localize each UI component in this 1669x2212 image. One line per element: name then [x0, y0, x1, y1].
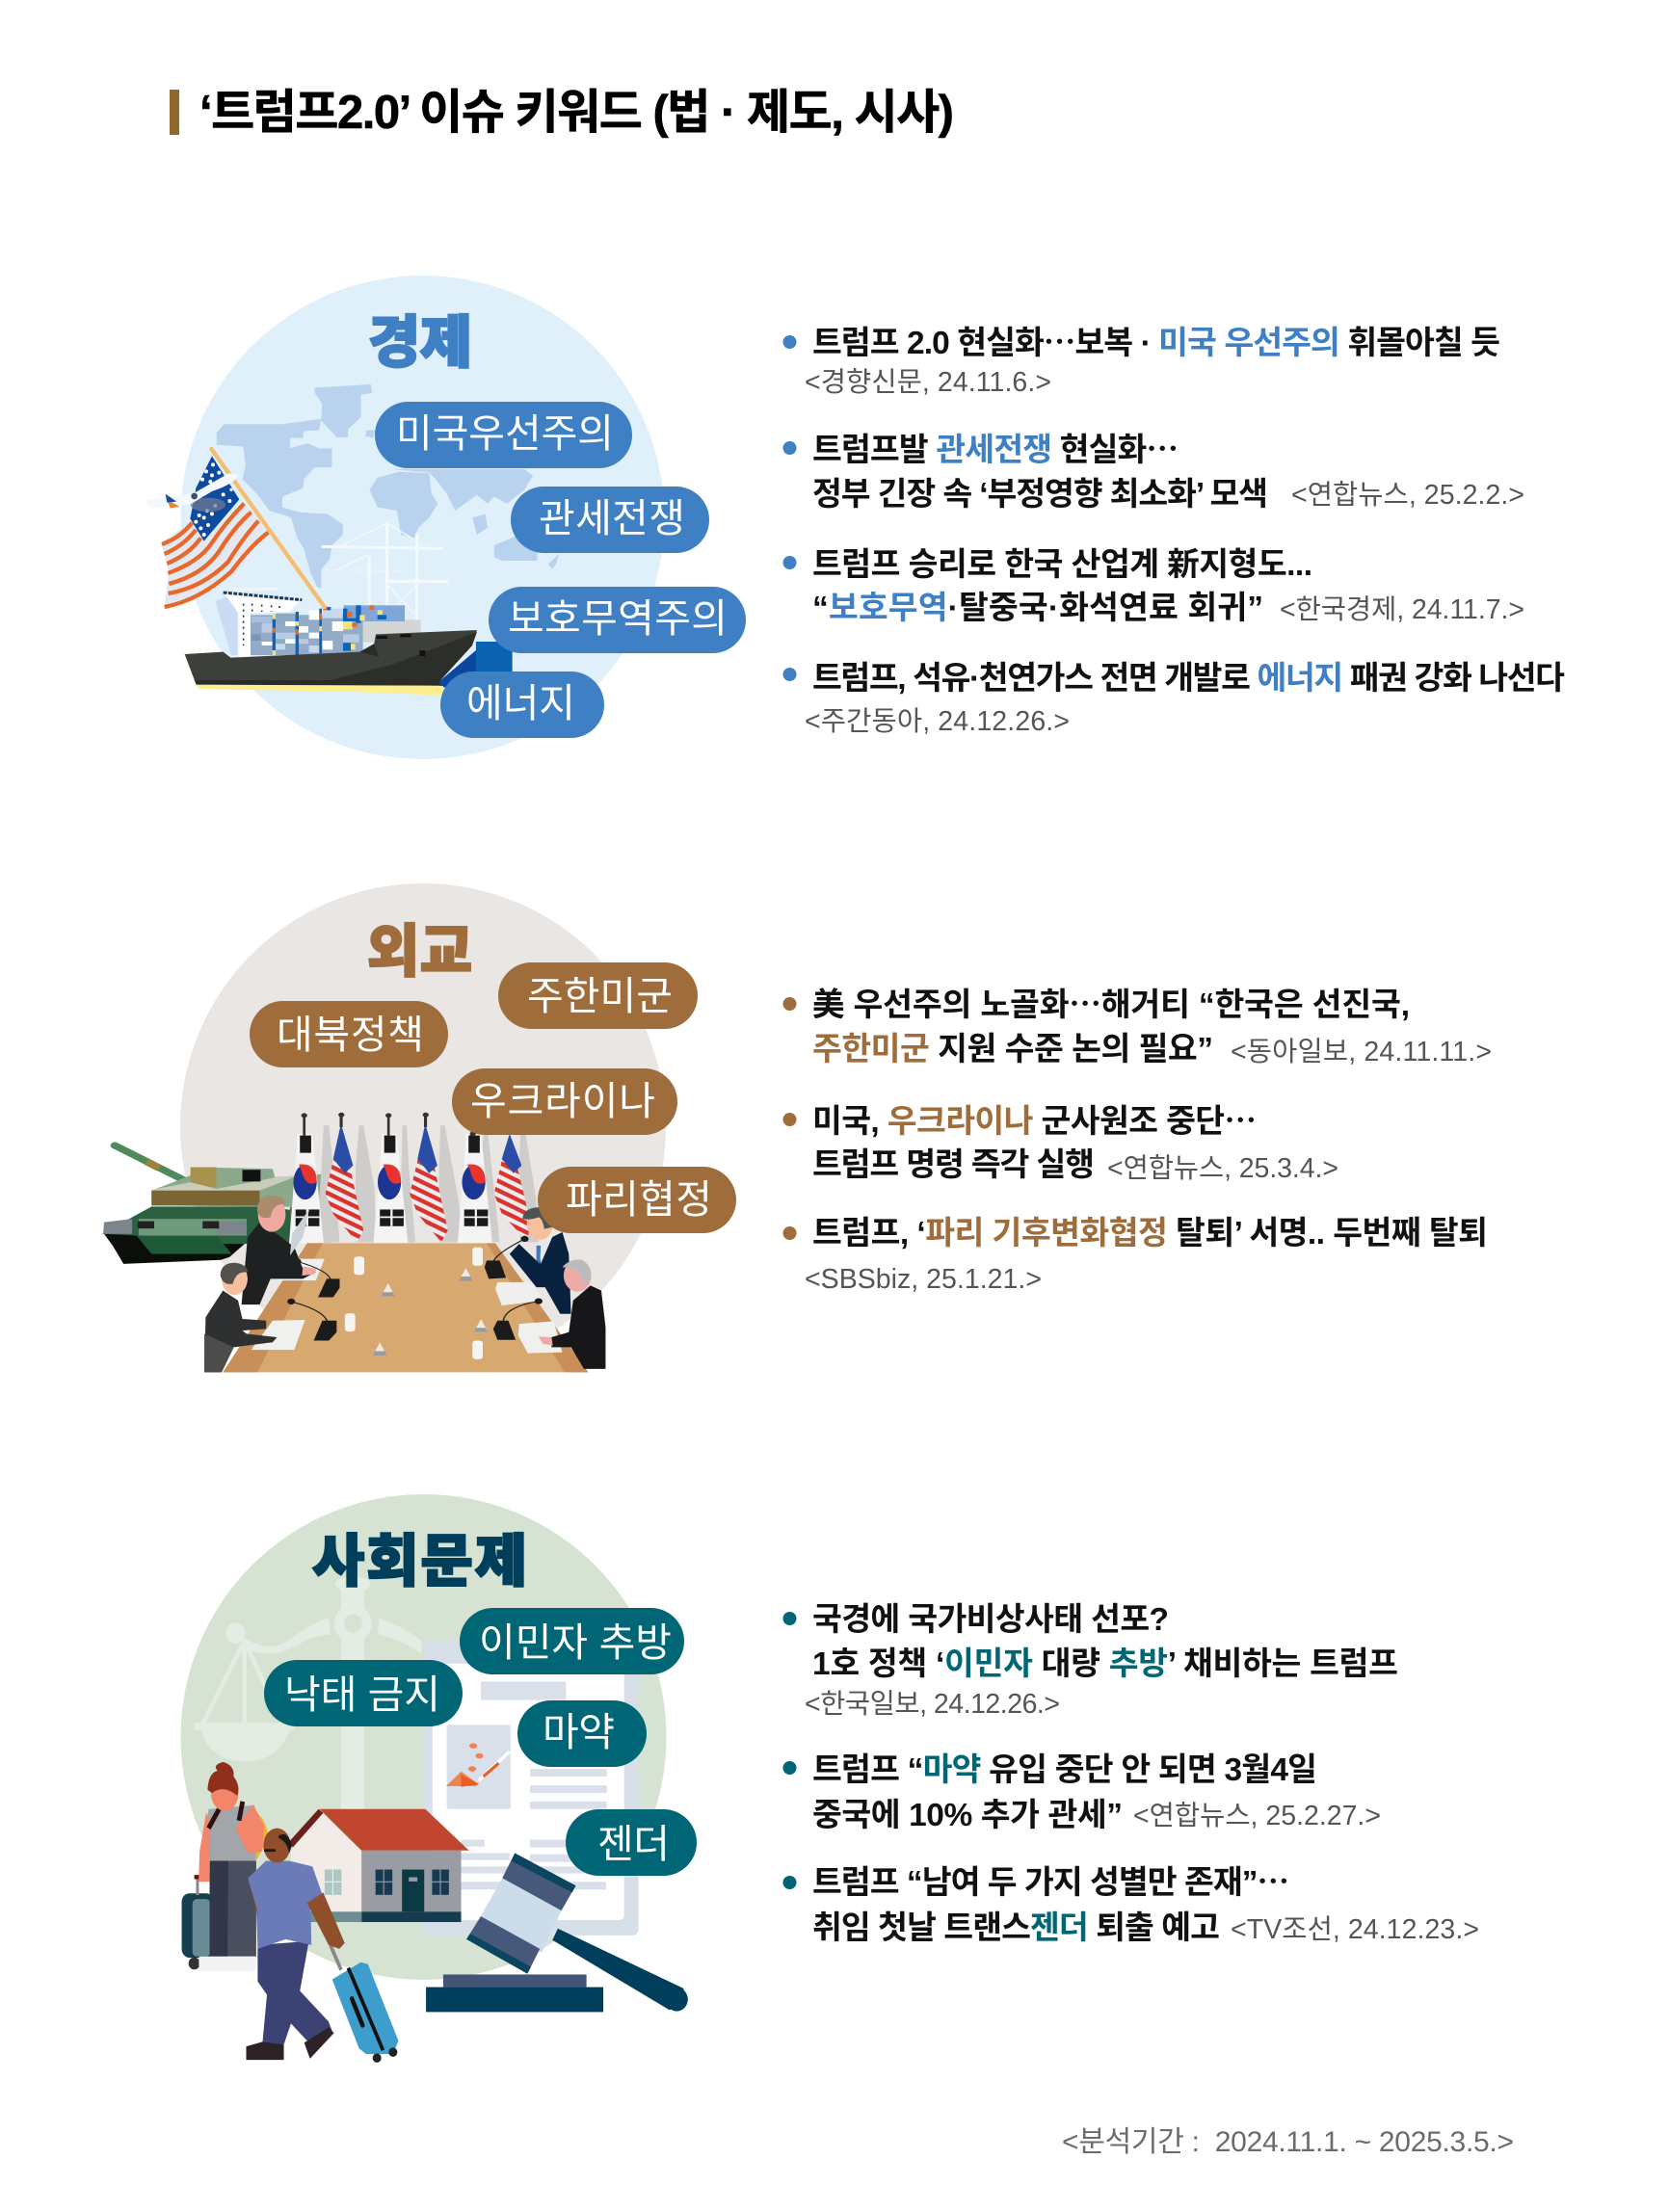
title: ‘트럼프2.0’ 이슈 키워드 (법 · 제도, 시사): [199, 87, 954, 139]
gavel: [426, 1853, 688, 2012]
tank: [102, 1146, 333, 1264]
news list: economy: [782, 326, 1565, 737]
keyword pills: social issues: 젠더: [597, 1811, 670, 1869]
news list: diplomacy: 미국, 우크라이나 군사원조 중단⋯: [812, 1104, 1257, 1140]
news list: social issues: [782, 1602, 1479, 1946]
keyword pills: diplomacy: [250, 962, 736, 1233]
flag pole: [211, 449, 325, 607]
news list: diplomacy: [782, 988, 1492, 1295]
news list: diplomacy: <동아일보, 24.11.11.>: [1231, 1037, 1492, 1067]
news list: economy: 트럼프 승리로 한국 산업계 新지형도...: [812, 547, 1312, 583]
news list: diplomacy: 트럼프, ‘파리 기후변화협정 탈퇴’ 서명.. 두번째 탈퇴: [812, 1216, 1488, 1251]
cups: [345, 1248, 483, 1359]
name plates: [373, 1268, 488, 1356]
news list: social issues: 1호 정책 ‘이민자 대량 추방’ 채비하는 트럼프: [812, 1646, 1398, 1682]
flags: [289, 1113, 539, 1243]
news list: diplomacy: 주한미군 지원 수준 논의 필요”: [812, 1032, 1213, 1067]
news list: diplomacy: 트럼프 명령 즉각 실행: [812, 1147, 1095, 1183]
news list: economy: 트럼프발 관세전쟁 현실화⋯: [812, 433, 1179, 468]
news list: diplomacy: <연합뉴스, 25.3.4.>: [1107, 1153, 1338, 1184]
keyword pills: diplomacy: 대북정책: [277, 1002, 424, 1060]
news list: diplomacy: 美 우선주의 노골화⋯해거티 “한국은 선진국,: [812, 988, 1410, 1023]
american flag: [161, 503, 268, 607]
news list: economy: <주간동아, 24.12.26.>: [805, 706, 1070, 737]
person front right: [539, 1259, 605, 1369]
world map: [217, 384, 559, 589]
house: [289, 1809, 469, 1922]
american flags: [326, 1123, 363, 1242]
keyword pills: social issues: [264, 1608, 697, 1876]
blue container: [440, 642, 513, 687]
news list: social issues: <한국일보, 24.12.26.>: [805, 1689, 1060, 1720]
news list: economy: <경향신문, 24.11.6.>: [805, 367, 1051, 398]
keyword pills: economy: 미국우선주의: [396, 401, 614, 459]
panel: social issues illustration: [181, 1494, 688, 2063]
panel: diplomacy illustration: [102, 883, 666, 1372]
keyword pills: social issues: 낙태 금지: [284, 1662, 440, 1720]
heading: 사회문제: 사회문제: [312, 1515, 527, 1597]
news list: social issues: 국경에 국가비상사태 선포?: [812, 1602, 1169, 1638]
news list: social issues: 트럼프 “마약 유입 중단 안 되면 3월4일: [812, 1752, 1317, 1788]
woman with suitcase: [182, 1762, 268, 1971]
conference table: [223, 1236, 588, 1372]
keyword pills: economy: 관세전쟁: [539, 486, 685, 543]
keyword pills: diplomacy: 파리협정: [566, 1167, 712, 1224]
news list: social issues: <TV조선, 24.12.23.>: [1231, 1914, 1479, 1945]
person back right: [510, 1207, 571, 1314]
person back left: [242, 1196, 317, 1304]
news list: economy: <연합뉴스, 25.2.2.>: [1291, 480, 1524, 511]
panel: economy illustration: [146, 276, 664, 759]
news list: economy: “보호무역·탈중국·화석연료 회귀”: [812, 591, 1263, 626]
heading: 외교: 외교: [367, 906, 472, 988]
keyword pills: diplomacy: 주한미군: [527, 963, 673, 1021]
keyword pills: diplomacy: 우크라이나: [470, 1068, 655, 1126]
keyword pills: economy: 보호무역주의: [508, 586, 728, 644]
container ship with flag: [146, 449, 513, 696]
news list: economy: <한국경제, 24.11.7.>: [1280, 594, 1524, 625]
microphones: [287, 1236, 543, 1340]
news list: economy: 트럼프 2.0 현실화⋯보복 · 미국 우선주의 휘몰아칠 듯: [812, 326, 1500, 361]
footnote: analysis period: <분석기간 : 2024.11.1. ~ 2025.3.5.>: [1062, 2126, 1514, 2158]
keyword pills: social issues: 이민자 추방: [479, 1610, 672, 1668]
news list: social issues: 취임 첫날 트랜스젠더 퇴출 예고: [812, 1910, 1220, 1946]
keyword pills: economy: [375, 401, 746, 738]
document: [423, 1641, 639, 1936]
news list: social issues: 중국에 10% 추가 관세”: [812, 1798, 1123, 1833]
news list: economy: 정부 긴장 속 ‘부정영향 최소화’ 모색: [812, 477, 1268, 513]
news list: social issues: <연합뉴스, 25.2.27.>: [1133, 1801, 1381, 1831]
drugs icon: [446, 1772, 479, 1786]
person front left: [204, 1263, 277, 1372]
plane: [146, 473, 238, 508]
ship hull: [196, 685, 443, 696]
scales of justice: [195, 1576, 422, 1817]
man with suitcase: [246, 1829, 398, 2063]
news list: diplomacy: <SBSbiz, 25.1.21.>: [805, 1264, 1042, 1295]
news list: economy: 트럼프, 석유·천연가스 전면 개발로 에너지 패권 강화 나선다: [812, 661, 1565, 697]
keyword pills: social issues: 마약: [543, 1699, 615, 1757]
heading: 경제: 경제: [368, 297, 472, 379]
keyword pills: economy: 에너지: [466, 671, 575, 728]
papers: [277, 1259, 325, 1280]
news list: social issues: 트럼프 “남여 두 가지 성별만 존재”⋯: [812, 1865, 1289, 1901]
korean flag: [289, 1134, 324, 1243]
